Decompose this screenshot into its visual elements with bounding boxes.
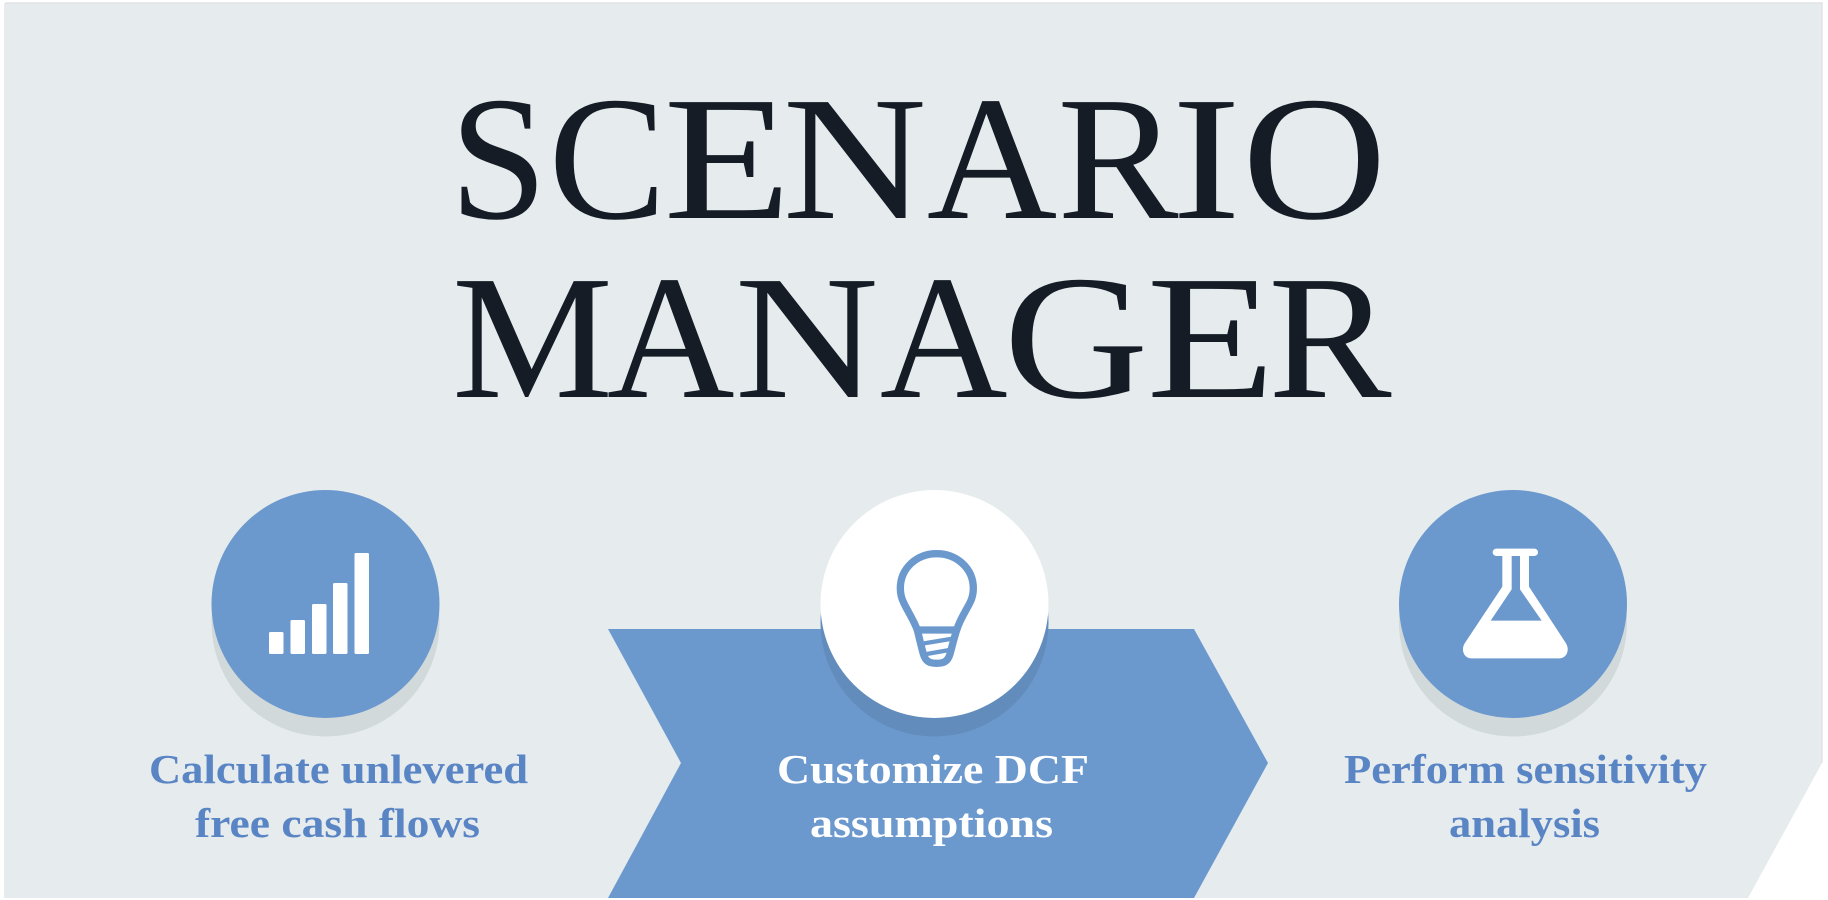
title: A: [927, 61, 1057, 257]
caption: customize: Customize DCF: [777, 746, 1089, 792]
circle shadow: [212, 508, 440, 736]
title: E: [1146, 240, 1275, 436]
caption: sensitivity: Perform sensitivity: [1344, 746, 1708, 792]
caption: calculate: free cash flows: [195, 800, 480, 846]
caption: sensitivity: analysis: [1449, 800, 1600, 846]
circle: [1399, 490, 1627, 718]
title: A: [607, 240, 735, 436]
icon: flask: [1463, 549, 1568, 658]
caption: calculate: Calculate unlevered: [149, 746, 528, 792]
title: R: [1268, 240, 1392, 436]
title: E: [664, 61, 791, 257]
title: C: [548, 61, 666, 257]
icon: bar chart: [269, 553, 369, 654]
title: A: [880, 240, 1008, 436]
title: [450, 61, 1392, 436]
circle: [212, 490, 440, 718]
step 3: sensitivity: [1344, 490, 1708, 846]
caption: sensitivity: [1344, 746, 1708, 846]
circle shadow: [1399, 508, 1627, 736]
circle shadow: [820, 508, 1048, 736]
step 1: calculate: [149, 490, 528, 846]
title: N: [783, 61, 927, 257]
caption: calculate: [149, 746, 528, 846]
chevron: middle step: [608, 629, 1268, 898]
caption: customize: assumptions: [810, 800, 1053, 846]
title: R: [1057, 61, 1179, 257]
title: I: [1172, 61, 1241, 257]
title: O: [1242, 61, 1387, 257]
icon: light bulb: [900, 554, 973, 663]
caption: customize: [777, 746, 1089, 846]
title: M: [452, 240, 613, 436]
step 2: customize: [777, 490, 1089, 846]
circle: [820, 490, 1048, 718]
title: G: [1004, 240, 1148, 436]
title: S: [450, 61, 547, 257]
title: N: [735, 240, 879, 436]
